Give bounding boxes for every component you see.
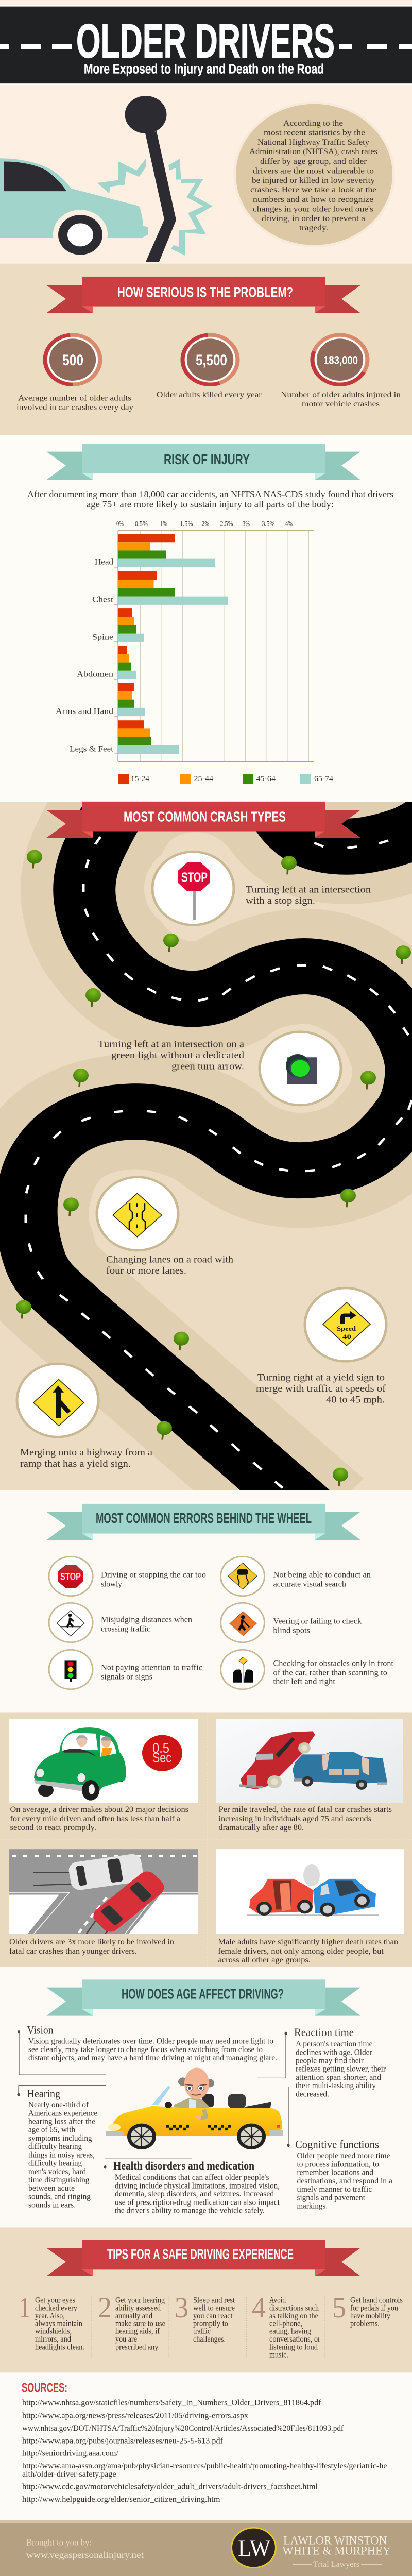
- crash type: changing lanes: [89, 1170, 233, 1276]
- logo: Lawlor Winston White & Murphey: LW: [238, 2536, 270, 2562]
- note: vision: Vision gradually deteriorates over time. Older people may need more light to: [28, 2036, 273, 2045]
- crash type: stop sign: STOP: [181, 870, 208, 885]
- error: visual search: accurate visual search: [273, 1579, 346, 1588]
- intro callout: be injured or killed in low-severity: [252, 176, 375, 185]
- source list: http://www.apa.org/news/press/releases/2011/05/driving-errors.aspx: [22, 2412, 248, 2420]
- fact: three times more likely: Older drivers are 3x more likely to be involved in: [9, 1937, 174, 1946]
- tip 4: as talking on the: [269, 2312, 318, 2320]
- note: hearing: time distinguishing: [28, 2175, 90, 2184]
- source list: http://www.cdc.gov/motorvehiclesafety/older_adult_drivers/adult-drivers_factsheet.html: [22, 2483, 318, 2491]
- tip 4: cell-phone,: [269, 2319, 302, 2328]
- note: reaction time: [258, 2026, 386, 2098]
- tip 2: Get your hearing: [115, 2296, 165, 2304]
- note: reaction time: decreased.: [296, 2089, 329, 2098]
- note: vision: Vision: [27, 2024, 54, 2036]
- stat: 183,000: [281, 326, 401, 409]
- fact: reaction decisions: second to react promptly.: [10, 1823, 96, 1832]
- bars: abdomen: Abdomen: [77, 669, 113, 679]
- note: cognitive functions: Older people need more time: [297, 2151, 390, 2160]
- bars: head: Head: [95, 557, 113, 566]
- brought to you by: Brought to you by:: [26, 2537, 92, 2548]
- title bar: [0, 7, 412, 83]
- logo: Lawlor Winston White & Murphey: [232, 2528, 391, 2569]
- fact: reaction decisions: On average, a driver makes about 20 major decisions: [10, 1805, 188, 1814]
- note: hearing: [18, 2086, 106, 2209]
- stat: 500: [16, 335, 133, 412]
- banner: tips: TIPS FOR A SAFE DRIVING EXPERIENCE: [107, 2246, 294, 2262]
- stat: 500: Average number of older adults: [18, 393, 131, 402]
- tip 1: year. Also,: [35, 2312, 64, 2320]
- tip 3: challenges.: [193, 2335, 226, 2344]
- error: misjudging distances: [49, 1603, 192, 1642]
- note: hearing: men's voices, hard: [28, 2167, 86, 2176]
- note: hearing: difficulty hearing: [28, 2142, 82, 2151]
- tip 2: hearing aids, if: [115, 2327, 160, 2336]
- fact: male death rates: Male adults have significantly higher death rates than: [218, 1937, 398, 1946]
- tip 1: headlights clean.: [35, 2343, 84, 2351]
- stat: 5,500: Older adults killed every year: [157, 390, 262, 399]
- intro callout: driving, in order to prevent a: [262, 214, 365, 223]
- fact: male death rates: across all other age groups.: [218, 1955, 311, 1964]
- banner: how serious: HOW SERIOUS IS THE PROBLEM?: [117, 284, 293, 300]
- crash type: right turn yield: merge with traffic at speeds of: [256, 1383, 386, 1394]
- tip 1: [19, 2292, 84, 2351]
- crash type: right turn yield: [256, 1288, 386, 1405]
- note: hearing: symptoms including: [28, 2133, 92, 2143]
- tip 5: [332, 2292, 403, 2328]
- error: driving too slowly: Driving or stopping the car too: [101, 1570, 206, 1579]
- fact: fatal crash rate: increasing in individuals aged 75 and ascends: [218, 1814, 371, 1823]
- fact: fatal crash rate: dramatically after age 80.: [218, 1823, 304, 1832]
- tip 3: promptly to: [193, 2319, 228, 2328]
- bars: arms and hand: Arms and Hand: [56, 706, 113, 716]
- tip 1: mirrors, and: [35, 2335, 71, 2344]
- legend: 45-64: [256, 775, 276, 783]
- note: cognitive functions: signals and pavement: [297, 2193, 365, 2202]
- bar chart: injury risk by age: [56, 520, 333, 784]
- source list: http://seniordriving.aaa.com/: [22, 2449, 119, 2458]
- tip 4: conversations, or: [269, 2335, 321, 2344]
- note: health disorders and medication: the driver's ability to manage the vehicle safely.: [115, 2206, 265, 2215]
- tip 2: [98, 2292, 165, 2351]
- bars: chest: Chest: [92, 595, 113, 604]
- source list: alth/older-driver-safety.page: [22, 2470, 116, 2479]
- illustration: green car: [34, 1727, 126, 1801]
- note: hearing: sounds in ears.: [28, 2200, 76, 2209]
- tip 1: checked every: [35, 2304, 78, 2312]
- axis labels: 3.5%: [262, 520, 274, 528]
- illustration: crashed toy cars: [239, 1731, 387, 1790]
- stat: 500: involved in car crashes every day: [16, 402, 133, 412]
- crash type: stop sign: with a stop sign.: [246, 895, 315, 906]
- fact: fatal crash rate: Per mile traveled, the rate of fatal car crashes starts: [218, 1805, 392, 1814]
- axis labels: 4%: [285, 520, 293, 528]
- note: health disorders and medication: driving include physical limitations, impaired vision,: [115, 2181, 280, 2190]
- legend: 15-24: [131, 775, 149, 783]
- banner: crash types: [46, 802, 360, 838]
- callout: half a second: Sec: [152, 1750, 171, 1766]
- tip 4: distractions such: [269, 2304, 319, 2312]
- error: obstacles scanning: their left and right: [273, 1676, 335, 1686]
- tip 4: Avoid: [269, 2296, 286, 2304]
- panel: header: [0, 0, 412, 263]
- stat: 183,000: motor vehicle crashes: [302, 399, 380, 409]
- crash type: right turn yield: 40: [342, 1333, 351, 1341]
- note: hearing: Hearing: [27, 2088, 60, 2100]
- intro callout: drivers are the most vulnerable to: [253, 166, 374, 175]
- bars: arms and hand: [56, 683, 145, 716]
- note: vision: distant objects, and may have a hard time driving at night and managing glare.: [28, 2053, 277, 2062]
- bars: spine: [92, 608, 144, 642]
- note: health disorders and medication: dementia, sleep disorders, and seizures. Increased: [115, 2189, 274, 2198]
- crash type: changing lanes: four or more lanes.: [106, 1265, 186, 1276]
- crash type: green light: [98, 1024, 349, 1112]
- note: reaction time: declines with age. Older: [296, 2047, 372, 2057]
- note: hearing: things in noisy areas,: [28, 2150, 95, 2159]
- note: vision: [18, 2024, 277, 2075]
- tip 5: have mobility: [350, 2312, 391, 2320]
- note: reaction time: attention span shorter, and: [296, 2073, 381, 2082]
- panel: footer: [0, 2520, 412, 2576]
- tip 2: annually and: [115, 2312, 152, 2320]
- fact: male death rates: female drivers, not only among older people, but: [218, 1946, 384, 1956]
- note: cognitive functions: markings.: [297, 2201, 328, 2210]
- brought to you by: www.vegaspersonalinjury.net: [26, 2550, 144, 2561]
- illustration: car hitting a pole: [0, 96, 213, 262]
- note: health disorders and medication: Health disorders and medication: [113, 2160, 254, 2172]
- stat: 5,500: [157, 328, 262, 399]
- logo: Lawlor Winston White & Murphey: Trial Lawyers: [313, 2560, 359, 2569]
- intro callout: most recent statistics by the: [264, 128, 365, 137]
- note: hearing: hearing loss after the: [28, 2116, 95, 2126]
- crash type: merging: ramp that has a yield sign.: [20, 1459, 131, 1469]
- axis labels: 3%: [243, 520, 250, 528]
- intro callout: crashes. Here we take a look at the: [250, 185, 376, 194]
- tip 3: well to ensure: [193, 2304, 235, 2312]
- intro callout: Administration (NHTSA), crash rates: [249, 147, 377, 156]
- error: driving too slowly: [49, 1556, 206, 1596]
- tip 2: ability assessed: [115, 2304, 161, 2312]
- crash type: right turn yield: Speed: [337, 1325, 356, 1332]
- axis labels: 2%: [202, 520, 209, 528]
- panel: most common errors: [0, 1490, 412, 1712]
- note: hearing: sounds, and ringing: [28, 2192, 91, 2201]
- tip 3: 3: [175, 2292, 188, 2324]
- bars: spine: Spine: [92, 632, 113, 641]
- note: health disorders and medication: [104, 2158, 280, 2215]
- tip 2: make sure to use: [115, 2319, 165, 2328]
- error: traffic signals: Not paying attention to traffic: [101, 1663, 202, 1672]
- stat: 5,500: 5,500: [196, 352, 227, 369]
- fact: male death rates: [216, 1849, 404, 1964]
- tip 1: Get your eyes: [35, 2296, 75, 2304]
- tip 3: you can react: [193, 2312, 233, 2320]
- banner: tips: [46, 2240, 360, 2276]
- note: hearing: between acute: [28, 2183, 75, 2193]
- fact: fatal crash rate: [216, 1719, 403, 1832]
- error: visual search: Not being able to conduct an: [273, 1570, 371, 1579]
- error: misjudging distances: crossing traffic: [101, 1624, 150, 1633]
- error: obstacles scanning: Checking for obstacles only in front: [273, 1658, 393, 1668]
- callout: half a second: 0.5: [152, 1740, 169, 1756]
- intro callout: differ by age group, and older: [260, 157, 367, 166]
- risk intro text: [27, 489, 393, 510]
- crash type: green light: green light without a dedicated: [111, 1050, 244, 1061]
- tip 5: for pedals if you: [350, 2304, 398, 2312]
- trees along the road: [16, 850, 411, 1486]
- illustration: older man in taxi: [106, 2068, 283, 2149]
- banner: crash types: MOST COMMON CRASH TYPES: [124, 809, 286, 825]
- source list: http://www.helpguide.org/elder/senior_citizen_driving.htm: [22, 2496, 220, 2504]
- tip 5: 5: [332, 2292, 346, 2324]
- bars: abdomen: [77, 646, 136, 679]
- crash type: merging: Merging onto a highway from a: [20, 1447, 152, 1458]
- panel: sources: [0, 2372, 412, 2520]
- tip 1: 1: [19, 2292, 30, 2324]
- source list: www.nhtsa.gov/DOT/NHTSA/Traffic%20Injury%20Control/Articles/Associated%20Files/811093.pdf: [22, 2425, 344, 2433]
- error: driving too slowly: slowly: [101, 1579, 122, 1588]
- risk intro text: age 75+ are more likely to sustain injury to all parts of the body:: [87, 500, 334, 510]
- logo: Lawlor Winston White & Murphey: LAWLOR WINSTON: [283, 2534, 387, 2547]
- error: obstacles scanning: of the car, rather than scanning to: [273, 1668, 387, 1677]
- callout: half a second: [142, 1735, 182, 1771]
- tip 4: [252, 2292, 321, 2359]
- note: reaction time: people may find their: [296, 2056, 364, 2065]
- note: cognitive functions: remember locations and: [297, 2167, 373, 2177]
- source list: http://www.ama-assn.org/ama/pub/physician-resources/public-health/promoting-healthy-lifestyles/geriatric-he: [22, 2462, 387, 2470]
- crosswalk dashes: [12, 1855, 197, 1857]
- error: blind spots: Veering or failing to check: [273, 1616, 362, 1625]
- tip 3: traffic: [193, 2327, 211, 2336]
- panel: how does age affect driving: [0, 1967, 412, 2227]
- subtitle: More Exposed to Injury and Death on the Road: [84, 61, 324, 76]
- fact: three times more likely: [9, 1849, 198, 1956]
- source list: [22, 2399, 387, 2504]
- note: hearing: Nearly one-third of: [28, 2100, 89, 2109]
- panel: tips: [0, 2227, 412, 2372]
- intro callout: changes in your older loved one's: [253, 204, 373, 213]
- crash type: stop sign: [144, 844, 371, 933]
- sources heading: SOURCES:: [22, 2381, 67, 2395]
- tip 1: windshields,: [35, 2327, 72, 2336]
- logo: Lawlor Winston White & Murphey: WHITE & MURPHEY: [282, 2545, 391, 2557]
- crash type: right turn yield: Turning right at a yield sign to: [258, 1372, 385, 1383]
- fact: three times more likely: fatal car crashes than younger drivers.: [9, 1946, 137, 1956]
- brought to you by: [26, 2537, 144, 2561]
- legend: 65-74: [314, 775, 333, 783]
- tip 4: listening to loud: [269, 2343, 318, 2351]
- stat: 183,000: Number of older adults injured in: [281, 390, 401, 399]
- axis labels: [116, 520, 293, 528]
- note: reaction time: reflexes getting slower, their: [296, 2064, 386, 2074]
- stat: 183,000: 183,000: [323, 354, 358, 367]
- crash type: right turn yield: 40 to 45 mph.: [326, 1394, 385, 1405]
- crash type: stop sign: Turning left at an intersection: [246, 884, 371, 895]
- tip 3: Sleep and rest: [193, 2296, 235, 2304]
- intro callout: National Highway Traffic Safety: [258, 138, 369, 147]
- note: hearing: Americans experience: [28, 2108, 97, 2117]
- winding road: [26, 774, 412, 1520]
- tip 4: eating, having: [269, 2327, 311, 2336]
- note: cognitive functions: destinations, and respond in a: [297, 2176, 392, 2185]
- note: vision: see clearly, may take longer to change focus when switching from close to: [28, 2045, 263, 2054]
- legend: [118, 774, 333, 784]
- bars: chest: [92, 571, 228, 605]
- source list: http://www.apa.org/pubs/journals/releases/neu-25-5-613.pdf: [22, 2437, 224, 2445]
- illustration: head-on collision: [247, 1864, 379, 1917]
- intro callout: tragedy.: [299, 223, 328, 232]
- illustration: white car: [67, 1853, 145, 1891]
- banner: how serious: [46, 277, 360, 313]
- error: obstacles scanning: [220, 1650, 393, 1689]
- bars: head: [95, 534, 215, 567]
- note: cognitive functions: timely manner to traffic: [297, 2184, 372, 2194]
- axis labels: 2.5%: [220, 520, 233, 528]
- banner: age: [46, 1979, 360, 2016]
- error: driving too slowly: STOP: [60, 1571, 81, 1582]
- axis labels: 1.5%: [180, 520, 193, 528]
- note: cognitive functions: to process information, to: [297, 2159, 379, 2168]
- bars: legs and feet: [70, 720, 179, 754]
- error: traffic signals: signals or signs: [101, 1672, 152, 1681]
- error: blind spots: blind spots: [273, 1625, 310, 1635]
- fact: reaction decisions: [9, 1719, 198, 1832]
- crash type: green light: Turning left at an intersection on a: [98, 1039, 244, 1049]
- crash type: changing lanes: Changing lanes on a road with: [106, 1254, 233, 1265]
- intro callout: [233, 101, 395, 247]
- banner: risk of injury: [46, 444, 360, 480]
- tip 2: prescribed any.: [115, 2343, 160, 2351]
- tip 2: you are: [115, 2335, 137, 2344]
- axis labels: 0.5%: [135, 520, 148, 528]
- banner: age: HOW DOES AGE AFFECT DRIVING?: [122, 1986, 284, 2002]
- crash type: merging: [17, 1364, 152, 1469]
- crash type: green light: green turn arrow.: [171, 1061, 244, 1072]
- note: hearing: age of 65, with: [28, 2125, 75, 2134]
- note: reaction time: their multi-tasking ability: [296, 2081, 376, 2090]
- note: health disorders and medication: Medical conditions that can affect older people's: [115, 2173, 269, 2182]
- banner: errors: [46, 1504, 360, 1540]
- note: hearing: difficulty hearing: [28, 2158, 82, 2167]
- error: blind spots: [220, 1603, 362, 1642]
- note: reaction time: Reaction time: [294, 2026, 354, 2039]
- road dashes: [0, 44, 412, 49]
- tip 4: music.: [269, 2351, 288, 2359]
- panel: risk of injury: [0, 435, 412, 802]
- source list: http://www.nhtsa.gov/staticfiles/numbers/Safety_In_Numbers_Older_Drivers_811864.pdf: [22, 2399, 321, 2407]
- legend: 25-44: [194, 775, 213, 783]
- axis labels: 1%: [160, 520, 167, 528]
- tip 5: problems.: [350, 2319, 380, 2328]
- note: cognitive functions: [258, 2087, 392, 2210]
- tip 5: Get hand controls: [350, 2296, 403, 2304]
- tip 1: always maintain: [35, 2319, 82, 2328]
- stat: 500: 500: [62, 352, 83, 369]
- note: cognitive functions: Cognitive functions: [295, 2138, 379, 2150]
- fact: reaction decisions: for every mile driven and often has less than half a: [10, 1814, 180, 1823]
- note: health disorders and medication: use of prescription-drug medication can also impact: [115, 2197, 280, 2207]
- banner: risk of injury: RISK OF INJURY: [164, 451, 250, 468]
- intro callout: According to the: [283, 118, 343, 128]
- intro callout: numbers and at how to recognize: [253, 195, 373, 204]
- axis labels: 0%: [116, 520, 124, 528]
- tip 4: 4: [252, 2292, 266, 2324]
- panel: photo facts: [0, 1712, 412, 1967]
- error: visual search: [220, 1556, 371, 1596]
- tip 3: [175, 2292, 235, 2344]
- note: reaction time: A person's reaction time: [296, 2039, 372, 2048]
- illustration: red car: [90, 1868, 168, 1935]
- error: misjudging distances: Misjudging distances when: [101, 1615, 192, 1624]
- bars: legs and feet: Legs & Feet: [70, 744, 113, 753]
- panel: how serious is the problem: [0, 264, 412, 435]
- panel: most common crash types: [0, 774, 412, 1520]
- error: traffic signals: [49, 1650, 202, 1689]
- tip 2: 2: [98, 2292, 112, 2324]
